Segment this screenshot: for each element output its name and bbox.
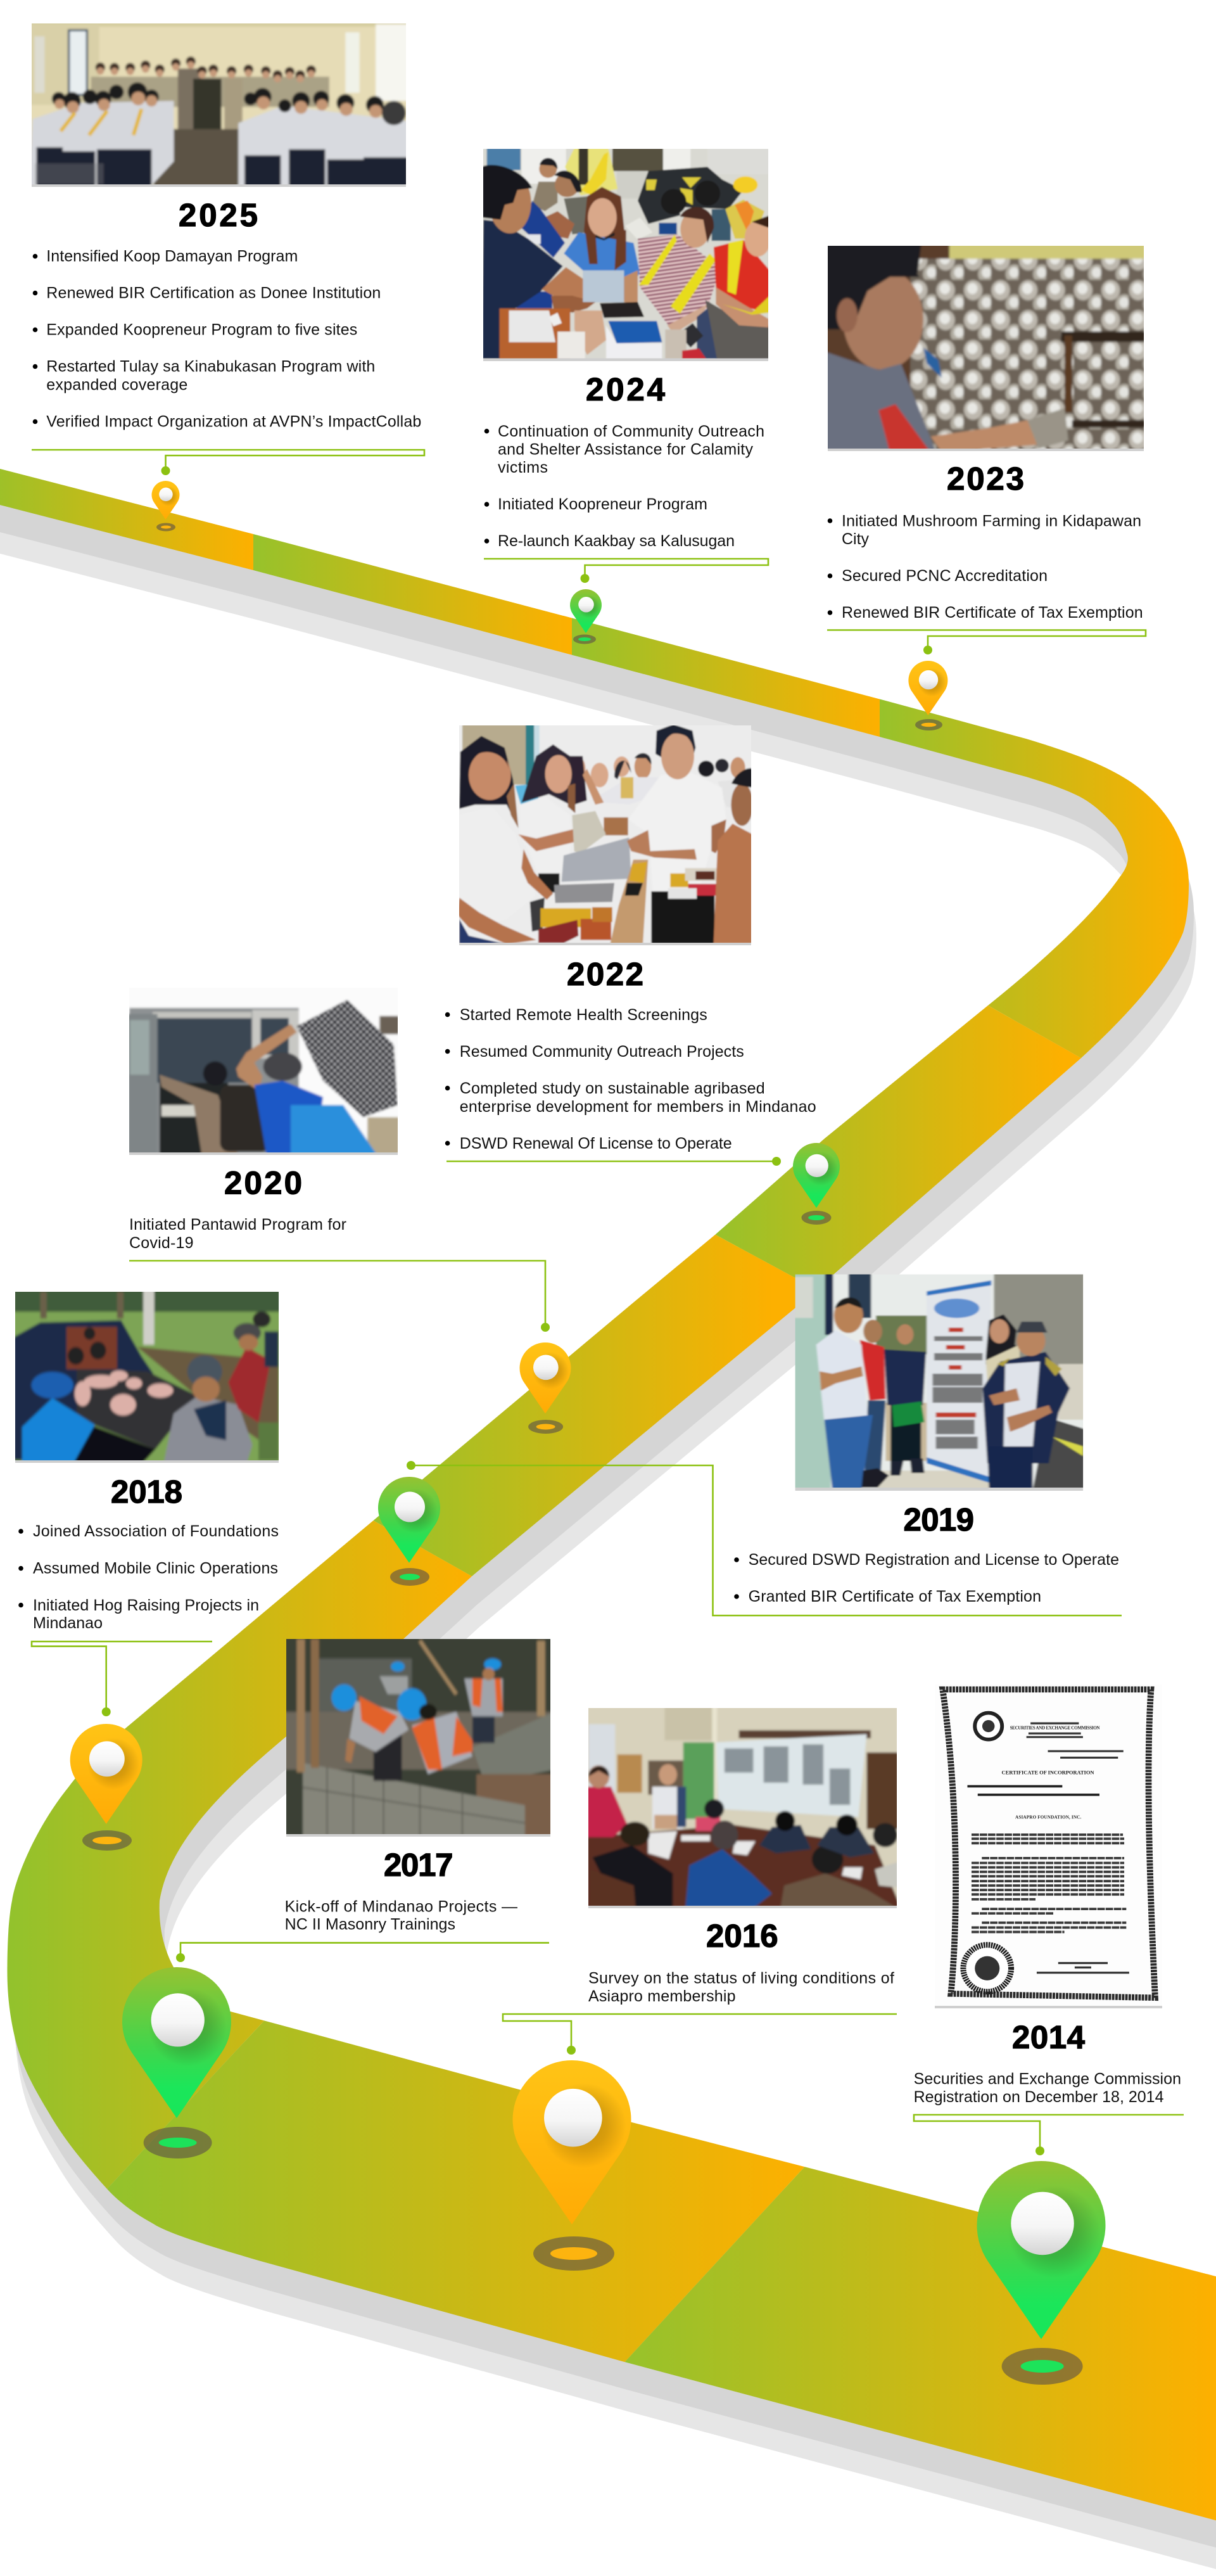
text block: 2014 achievement [914, 2070, 1181, 2106]
text block: 2016 achievement [588, 1970, 894, 2005]
year heading: 2020 [224, 1164, 302, 1201]
text block: 2023 achievements [828, 513, 1143, 622]
photo: 2014 certificate of incorporation [935, 1685, 1162, 2008]
text block: 2016 achievement: Survey on the status of living conditions of [588, 1970, 894, 1987]
text block: 2018 achievements: Mindanao [33, 1614, 103, 1632]
text block: 2025 achievements: expanded coverage [46, 376, 187, 393]
text block: 2022 achievements: Started Remote Health Screenings [460, 1006, 707, 1024]
icon: 2024 green map pin [570, 589, 602, 644]
text block: 2020 achievement: Initiated Pantawid Program for [129, 1216, 346, 1234]
text block: 2023 achievements: Secured PCNC Accreditation [842, 567, 1048, 585]
panel: 2018 [11, 1287, 282, 1716]
connector line 2022 [446, 1157, 781, 1166]
photo: 2014 certificate of incorporation: SECURITIES AND EXCHANGE COMMISSION [1010, 1726, 1101, 1731]
icon: 2025 orange map pin [152, 481, 180, 531]
text block: 2025 achievements: Verified Impact Organization at AVPN’s ImpactCollab [46, 413, 421, 431]
text block: 2023 achievements: Initiated Mushroom Farming in Kidapawan [842, 513, 1141, 530]
text block: 2019 achievements [734, 1551, 1119, 1605]
connector line 2017 [176, 1943, 549, 1962]
connector line 2014 [914, 2115, 1184, 2155]
text block: 2025 achievements [33, 248, 421, 431]
text block: 2018 achievements: Assumed Mobile Clinic Operations [33, 1560, 278, 1578]
photo: 2016 survey meeting [584, 1704, 902, 1910]
text block: 2020 achievement [129, 1216, 346, 1252]
text block: 2025 achievements: Renewed BIR Certification as Donee Institution [46, 284, 381, 302]
text block: 2022 achievements: enterprise development for members in Mindanao [460, 1098, 816, 1116]
icon: 2023 orange map pin [908, 661, 947, 730]
photo: 2018 hog raising truck [11, 1287, 282, 1465]
text block: 2024 achievements: Continuation of Community Outreach [498, 423, 764, 440]
year heading: 2016 [706, 1918, 778, 1954]
text block: 2023 achievements: City [842, 530, 869, 548]
photo: 2025 group of students [28, 20, 410, 188]
text block: 2022 achievements [445, 1006, 816, 1152]
year heading: 2025 [179, 197, 258, 233]
text block: 2024 achievements: and Shelter Assistance for Calamity [498, 441, 754, 459]
text block: 2024 achievements: Re-launch Kaakbay sa Kalusugan [498, 532, 735, 550]
icon: 2019 green map pin [378, 1477, 440, 1586]
icon: 2014 green map pin [977, 2161, 1106, 2385]
text block: 2018 achievements [18, 1522, 279, 1632]
panel: 2023 [825, 243, 1148, 654]
text block: 2017 achievement: Kick-off of Mindanao Projects — [285, 1898, 517, 1916]
text block: 2018 achievements: Joined Association of Foundations [33, 1522, 279, 1540]
year heading: 2018 [111, 1474, 182, 1510]
icon: 2016 orange map pin [513, 2060, 631, 2271]
panel: 2025 [28, 20, 424, 475]
year heading: 2017 [384, 1847, 453, 1883]
text block: 2017 achievement [285, 1898, 517, 1934]
connector line 2024 [484, 559, 768, 583]
connector line 2018 [32, 1642, 212, 1716]
photo: 2014 certificate of incorporation: ASIAPRO FOUNDATION, INC. [1015, 1815, 1082, 1820]
text block: 2016 achievement: Asiapro membership [588, 1987, 736, 2005]
text block: 2024 achievements: victims [498, 459, 548, 476]
text block: 2025 achievements: Restarted Tulay sa Kinabukasan Program with [46, 358, 375, 376]
text block: 2017 achievement: NC II Masonry Trainings [285, 1916, 455, 1934]
photo: 2014 certificate of incorporation: CERTIFICATE OF INCORPORATION [1002, 1769, 1094, 1775]
photo: 2024 health screening [481, 147, 771, 361]
year heading: 2014 [1012, 2019, 1086, 2055]
text block: 2018 achievements: Initiated Hog Raising Projects in [33, 1597, 259, 1614]
text block: 2014 achievement: Registration on December 18, 2014 [914, 2088, 1164, 2106]
text block: 2022 achievements: DSWD Renewal Of License to Operate [460, 1135, 732, 1152]
panel: 2016 [503, 1704, 902, 2055]
connector line 2019 [407, 1461, 1122, 1616]
icon: 2022 green map pin [793, 1143, 840, 1225]
panel: 2020 [125, 984, 550, 1332]
text block: 2024 achievements [484, 423, 764, 550]
connector line 2025 [32, 450, 424, 475]
text block: 2024 achievements: Initiated Koopreneur Program [498, 495, 707, 513]
photo: 2019 team with banner [792, 1272, 1086, 1491]
year heading: 2019 [903, 1502, 974, 1538]
connector line 2016 [503, 2014, 897, 2055]
panel: 2022 [445, 724, 816, 1166]
text block: 2020 achievement: Covid-19 [129, 1234, 194, 1252]
year heading: 2023 [947, 461, 1024, 497]
icon: 2018 orange map pin [70, 1724, 142, 1851]
text block: 2025 achievements: Intensified Koop Damayan Program [46, 248, 298, 265]
icon: 2017 green map pin [122, 1967, 231, 2158]
text block: 2025 achievements: Expanded Koopreneur Program to five sites [46, 321, 357, 339]
photo: 2023 mushroom farming [825, 243, 1148, 452]
text block: 2019 achievements: Secured DSWD Registration and License to Operate [749, 1551, 1119, 1569]
icon: 2020 orange map pin [519, 1342, 571, 1434]
year heading: 2022 [567, 956, 643, 992]
panel: 2017 [176, 1635, 554, 1962]
text block: 2023 achievements: Renewed BIR Certificate of Tax Exemption [842, 604, 1143, 622]
panel: 2019 [407, 1272, 1122, 1616]
photo: 2017 masonry training [282, 1635, 554, 1839]
year heading: 2024 [586, 371, 666, 407]
text block: 2019 achievements: Granted BIR Certificate of Tax Exemption [749, 1588, 1041, 1605]
text block: 2022 achievements: Resumed Community Outreach Projects [460, 1043, 744, 1061]
connector line 2020 [129, 1261, 550, 1332]
photo: 2020 Pantawid relief loading [125, 984, 402, 1156]
panel: 2014 [914, 1685, 1184, 2155]
text block: 2022 achievements: Completed study on sustainable agribased [460, 1080, 765, 1097]
connector line 2023 [827, 630, 1146, 654]
panel: 2024 [481, 147, 771, 583]
photo: 2022 outreach gift packs [457, 724, 753, 945]
text block: 2014 achievement: Securities and Exchange Commission [914, 2070, 1181, 2088]
